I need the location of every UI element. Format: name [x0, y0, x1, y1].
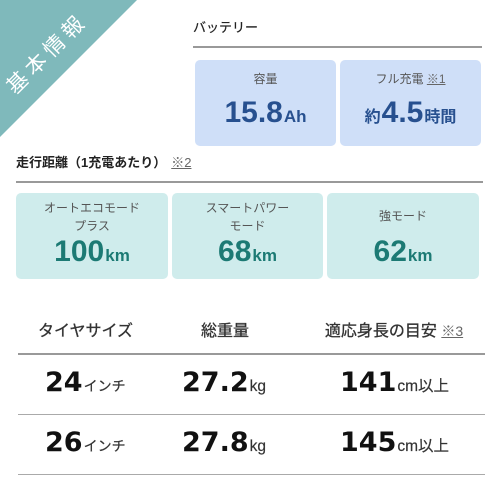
panel: auto eco mode plus: オートエコモード [44, 201, 140, 215]
row 1: height 141: 141cm以上 [340, 367, 449, 398]
panel: smart power mode: 68km [218, 235, 277, 268]
row 1: weight 27.2: 27.2kg [182, 367, 266, 398]
panel: auto eco mode plus: プラス [74, 219, 110, 233]
panel: capacity: 15.8Ah [224, 96, 307, 129]
panel: smart power mode: モード [229, 219, 266, 233]
panel: capacity: 容量 [253, 72, 278, 86]
heading: 走行距離: 走行距離（1充電あたり） ※2 [16, 155, 191, 170]
panel: full charge: フル充電 ※1 [375, 72, 446, 86]
panel: smart power mode: スマートパワー [206, 201, 289, 215]
table header: total weight: 総重量 [201, 323, 249, 340]
panel: capacity [195, 60, 336, 146]
row 1: tire 24: 24インチ [45, 367, 126, 398]
corner ribbon: 基本情報 [0, 0, 137, 137]
panel: strong mode [327, 193, 479, 279]
row 2: height 145: 145cm以上 [340, 427, 449, 458]
panel: strong mode: 62km [374, 235, 432, 268]
panel: smart power mode [172, 193, 323, 279]
row 2: weight 27.8: 27.8kg [182, 427, 266, 458]
corner ribbon: 基本情報: 基本情報 [3, 9, 92, 99]
table header: suitable height: 適応身長の目安 ※3 [325, 323, 463, 340]
panel: strong mode: 強モード [379, 209, 427, 223]
panel: full charge: 約4.5時間 [365, 96, 456, 129]
panel: auto eco mode plus [16, 193, 168, 279]
panel: auto eco mode plus: 100km [54, 235, 130, 268]
panel: full charge [340, 60, 481, 146]
table header: tire size: タイヤサイズ [38, 323, 133, 340]
row 2: tire 26: 26インチ [45, 427, 126, 458]
heading: バッテリー: バッテリー [193, 20, 258, 35]
